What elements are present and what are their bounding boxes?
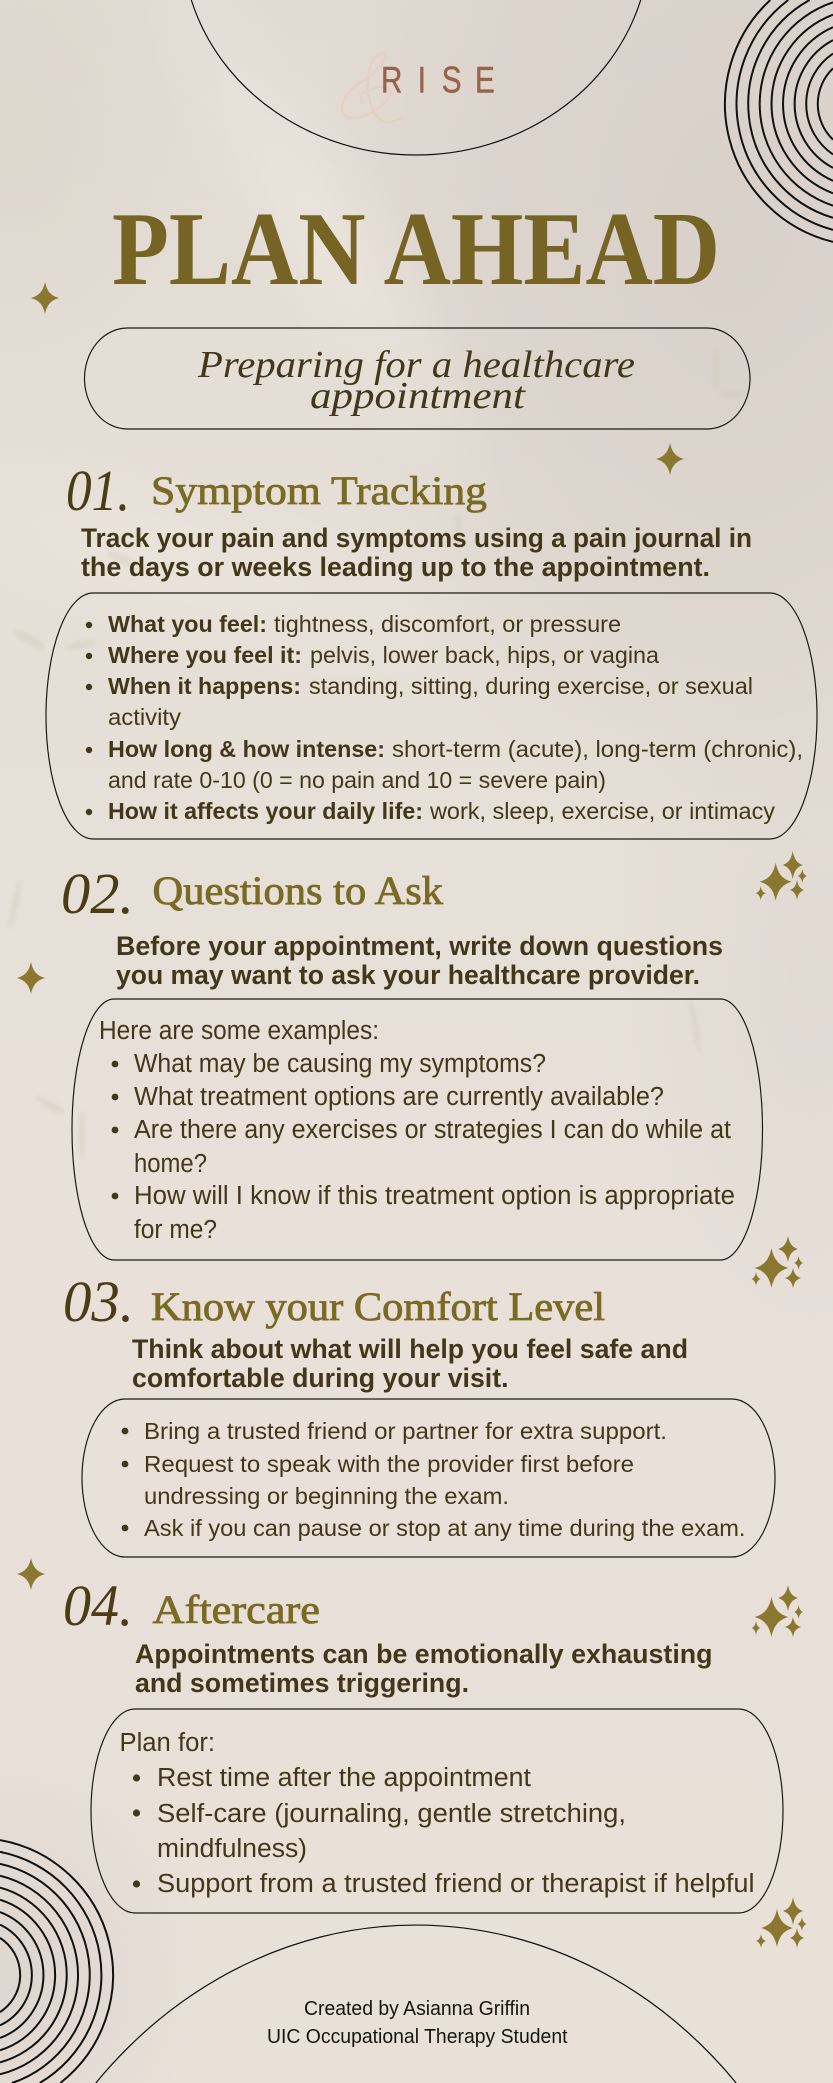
top arc bbox=[191, 0, 641, 155]
number 02: 02. bbox=[61, 861, 134, 926]
panel: example questions: home? bbox=[134, 1150, 207, 1178]
panel: example questions: How will I know if this treatment option is appropriate bbox=[134, 1182, 735, 1210]
section 02: questions to ask bbox=[61, 861, 762, 1260]
icon: sparkle cluster 4 bbox=[756, 1897, 807, 1948]
lead text: Think about what will help you feel safe and bbox=[132, 1334, 688, 1364]
lead text: Before your appointment, write down questions bbox=[116, 931, 723, 961]
icon: sparkle right bbox=[656, 443, 684, 475]
number 03: 03. bbox=[63, 1269, 134, 1334]
heading: Questions to Ask bbox=[152, 868, 443, 913]
panel: comfort list: Ask if you can pause or stop at any time during the exam. bbox=[144, 1515, 746, 1541]
subtitle pill: appointment bbox=[310, 375, 527, 417]
lead text: comfortable during your visit. bbox=[132, 1363, 508, 1393]
panel: symptom list: and rate 0-10 (0 = no pain and 10 = severe pain) bbox=[108, 767, 606, 793]
lead text: and sometimes triggering. bbox=[135, 1668, 469, 1698]
panel: aftercare list: Plan for: bbox=[120, 1729, 215, 1757]
lead text bbox=[81, 523, 752, 582]
panel: symptom list: work, sleep, exercise, or intimacy bbox=[429, 798, 775, 824]
bottom arc bbox=[96, 1925, 736, 2083]
logo: RISE bbox=[342, 54, 495, 122]
footer credit: UIC Occupational Therapy Student bbox=[267, 2026, 568, 2048]
heading: Know your Comfort Level bbox=[151, 1284, 605, 1329]
footer credit: Created by Asianna Griffin bbox=[304, 1998, 530, 2020]
panel: symptom list: What you feel: bbox=[108, 611, 267, 637]
panel: symptom list: How it affects your daily life: bbox=[108, 798, 423, 824]
panel: symptom list: Where you feel it: bbox=[108, 642, 302, 668]
panel: symptom list: How long & how intense: bbox=[108, 736, 385, 762]
panel: symptom list: When it happens: bbox=[108, 673, 301, 699]
panel: symptom list: standing, sitting, during exercise, or sexual bbox=[309, 673, 753, 699]
panel: symptom list: activity bbox=[108, 704, 181, 730]
panel: example questions bbox=[72, 999, 762, 1260]
panel: comfort list: Request to speak with the provider first before bbox=[144, 1451, 634, 1477]
panel: example questions: Here are some examples: bbox=[99, 1017, 379, 1045]
lead text: you may want to ask your healthcare provider. bbox=[116, 960, 700, 990]
footer credit bbox=[267, 1998, 568, 2048]
lead text: Appointments can be emotionally exhausting bbox=[135, 1639, 712, 1669]
concentric rings bottom left bbox=[0, 1840, 113, 2083]
icon: sparkle left of section 02 bbox=[17, 962, 45, 994]
panel: aftercare list bbox=[91, 1709, 783, 1913]
heading: Symptom Tracking bbox=[151, 468, 487, 513]
logo: RISE: RISE bbox=[381, 60, 495, 101]
lead text bbox=[116, 931, 723, 990]
panel: aftercare list: Self-care (journaling, gentle stretching, bbox=[157, 1800, 626, 1828]
lead text: the days or weeks leading up to the appointment. bbox=[81, 552, 710, 582]
icon: sparkle cluster 3 bbox=[752, 1585, 803, 1637]
section 04: aftercare bbox=[63, 1573, 783, 1913]
concentric rings top right bbox=[725, 0, 833, 242]
panel: symptom list: tightness, discomfort, or pressure bbox=[274, 611, 621, 637]
number 04: 04. bbox=[63, 1573, 133, 1638]
subtitle pill: Preparing for a healthcare bbox=[197, 344, 635, 386]
lead text bbox=[132, 1334, 688, 1393]
panel: example questions: What treatment options are currently available? bbox=[134, 1083, 664, 1111]
section 03: comfort level bbox=[63, 1269, 775, 1557]
lead text bbox=[135, 1639, 712, 1698]
title: PLAN AHEAD bbox=[112, 190, 720, 307]
panel: aftercare list: Support from a trusted friend or therapist if helpful bbox=[157, 1870, 754, 1898]
panel: symptom list: short-term (acute), long-term (chronic), bbox=[392, 736, 803, 762]
panel: example questions: Are there any exercises or strategies I can do while at bbox=[134, 1116, 731, 1144]
heading: Aftercare bbox=[152, 1587, 320, 1632]
panel: symptom list: pelvis, lower back, hips, or vagina bbox=[310, 642, 660, 668]
icon: sparkle cluster 2 bbox=[752, 1236, 803, 1288]
panel: example questions: What may be causing my symptoms? bbox=[134, 1050, 546, 1078]
panel: example questions: for me? bbox=[134, 1216, 217, 1244]
panel: aftercare list: Rest time after the appointment bbox=[157, 1764, 531, 1792]
panel: aftercare list: mindfulness) bbox=[157, 1835, 307, 1863]
section 01: symptom tracking bbox=[46, 458, 817, 839]
icon: sparkle left of subtitle bbox=[31, 282, 59, 314]
lead text: Track your pain and symptoms using a pain journal in bbox=[81, 523, 752, 553]
number 01: 01. bbox=[66, 458, 130, 523]
panel: comfort list: Bring a trusted friend or partner for extra support. bbox=[144, 1418, 667, 1444]
panel: comfort list bbox=[82, 1399, 775, 1557]
panel: symptom list bbox=[46, 593, 817, 839]
subtitle pill bbox=[84, 328, 750, 429]
icon: sparkle cluster 1 bbox=[756, 851, 807, 901]
panel: comfort list: undressing or beginning the exam. bbox=[144, 1483, 509, 1509]
icon: sparkle left of section 04 bbox=[17, 1558, 45, 1590]
